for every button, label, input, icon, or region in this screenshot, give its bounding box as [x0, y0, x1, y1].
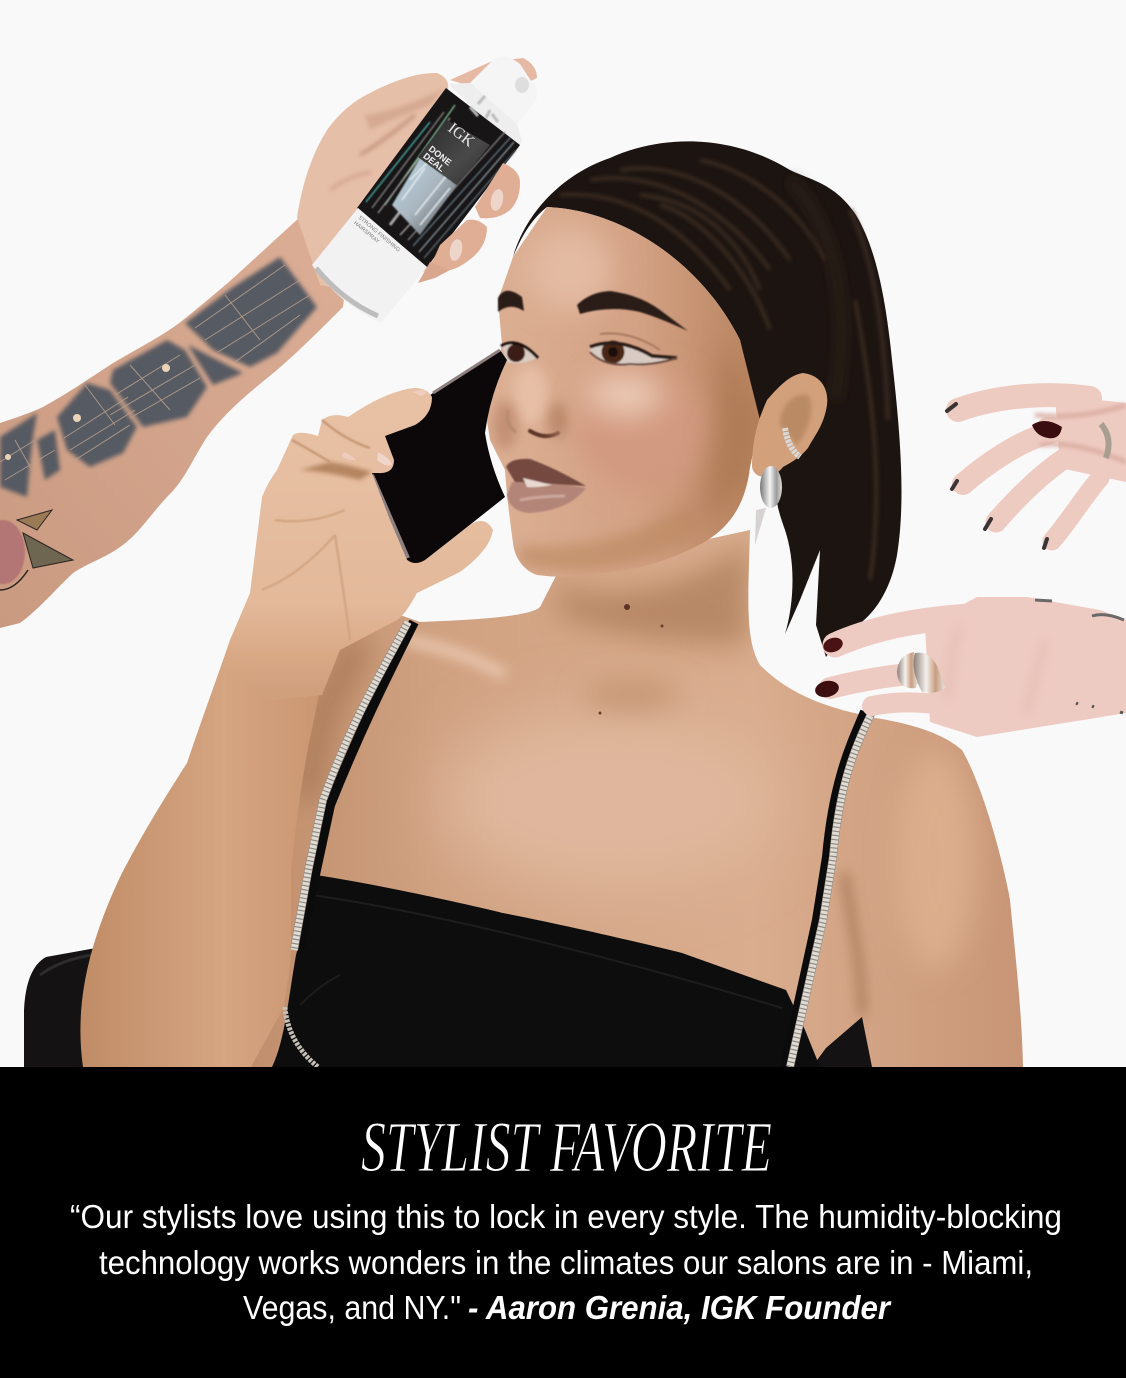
product name: DONE: [427, 144, 453, 168]
upper right hand with painted nails: [947, 395, 1126, 548]
panel streaks: [402, 160, 450, 225]
heading: STYLIST FAVORITE: [361, 1107, 772, 1187]
holographic streaks: [366, 96, 516, 258]
rose tattoo: [0, 510, 73, 590]
facial lighting: [493, 228, 760, 571]
ear cuff: [785, 428, 800, 457]
rhinestone straps: [285, 622, 872, 1067]
spray can: [312, 57, 537, 323]
base label text: STRONG FINISHING: [357, 215, 401, 254]
hand holding phone: [222, 388, 493, 700]
can cap: [470, 57, 537, 124]
testimonial quote: technology works wonders in the climates our salons are in - Miami,: [99, 1244, 1033, 1281]
testimonial quote: Vegas, and NY.": [243, 1289, 461, 1326]
eyebrows: [498, 291, 688, 331]
can shoulder: [448, 83, 522, 150]
silver earring: [755, 466, 782, 545]
tattooed arm: [0, 217, 345, 628]
grey label panel: [418, 120, 490, 185]
brand text: IGK: [445, 120, 478, 151]
eyes: [501, 333, 677, 366]
raised arm: [80, 620, 340, 1067]
black strapless dress: [272, 875, 820, 1067]
rings: [897, 652, 945, 693]
black caption panel: [0, 1067, 1126, 1378]
fingers wrapped around can: [418, 163, 520, 283]
torso and neck: [250, 530, 1023, 1067]
photo background: [0, 0, 1126, 1068]
lower right hand with rings: [814, 597, 1126, 737]
lips: [506, 459, 586, 513]
product name: DEAL: [421, 151, 447, 174]
guitar neck tattoo: [0, 257, 317, 497]
chair back: [24, 948, 96, 1067]
holographic panel: [392, 158, 457, 235]
body shading: [305, 540, 975, 1015]
can body: [357, 88, 520, 267]
ear inner fold: [780, 395, 811, 445]
face: [486, 207, 760, 577]
testimonial quote: “Our stylists love using this to lock in every style. The humidity-blocking: [70, 1198, 1062, 1235]
phone: [370, 350, 507, 564]
testimonial quote: [70, 1198, 1062, 1326]
base label text: HAIRSPRAY: [352, 220, 380, 245]
ponytail and hair: [513, 141, 901, 657]
can white base: [312, 208, 427, 323]
can base rim: [316, 268, 378, 316]
nose: [507, 402, 567, 438]
testimonial quote: - Aaron Grenia, IGK Founder: [468, 1289, 892, 1326]
ear: [752, 373, 827, 477]
chair right side: [812, 1017, 872, 1067]
hand holding spray can: [297, 58, 537, 290]
